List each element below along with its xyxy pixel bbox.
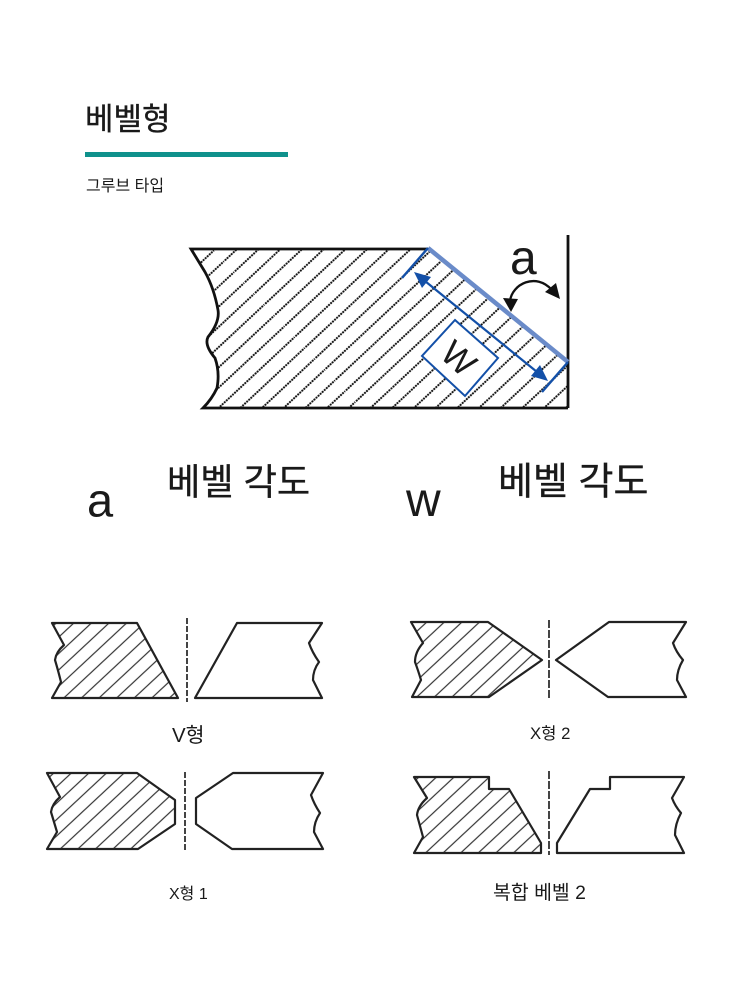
legend: a bevel angle bbox=[87, 462, 310, 526]
diagram: compound bevel 2 bbox=[414, 771, 684, 855]
vertical reference line bbox=[567, 235, 569, 408]
angle arc arrow bbox=[503, 281, 560, 312]
label: X groove 1: X형 1 bbox=[169, 885, 208, 903]
title underline bbox=[85, 152, 288, 157]
plate outline bbox=[191, 249, 568, 408]
diagram: V groove bbox=[52, 618, 322, 702]
label: V groove: V형 bbox=[172, 724, 205, 747]
hatched plate section bbox=[191, 249, 568, 408]
diagram: X groove 1 bbox=[47, 772, 323, 851]
legend: a bevel angle: a bbox=[87, 474, 114, 526]
label: X groove 2: X형 2 bbox=[530, 724, 570, 743]
angle label a: a bbox=[510, 232, 537, 285]
width label box bbox=[422, 320, 498, 396]
width label box: W bbox=[433, 333, 484, 384]
legend: w bevel angle: w bbox=[405, 474, 441, 527]
title: 베벨형 bbox=[85, 102, 171, 137]
width dimension arrow bbox=[402, 248, 568, 392]
legend: a bevel angle: 베벨 각도 bbox=[167, 462, 310, 502]
legend: w bevel angle bbox=[405, 462, 648, 527]
subtitle: 그루브 타입 bbox=[86, 177, 164, 195]
main bevel diagram bbox=[191, 232, 568, 408]
diagram: X groove 2 bbox=[411, 620, 686, 699]
legend: w bevel angle: 베벨 각도 bbox=[498, 462, 648, 504]
label: compound bevel 2: 복합 베벨 2 bbox=[493, 882, 586, 904]
bevel face bbox=[428, 248, 568, 362]
